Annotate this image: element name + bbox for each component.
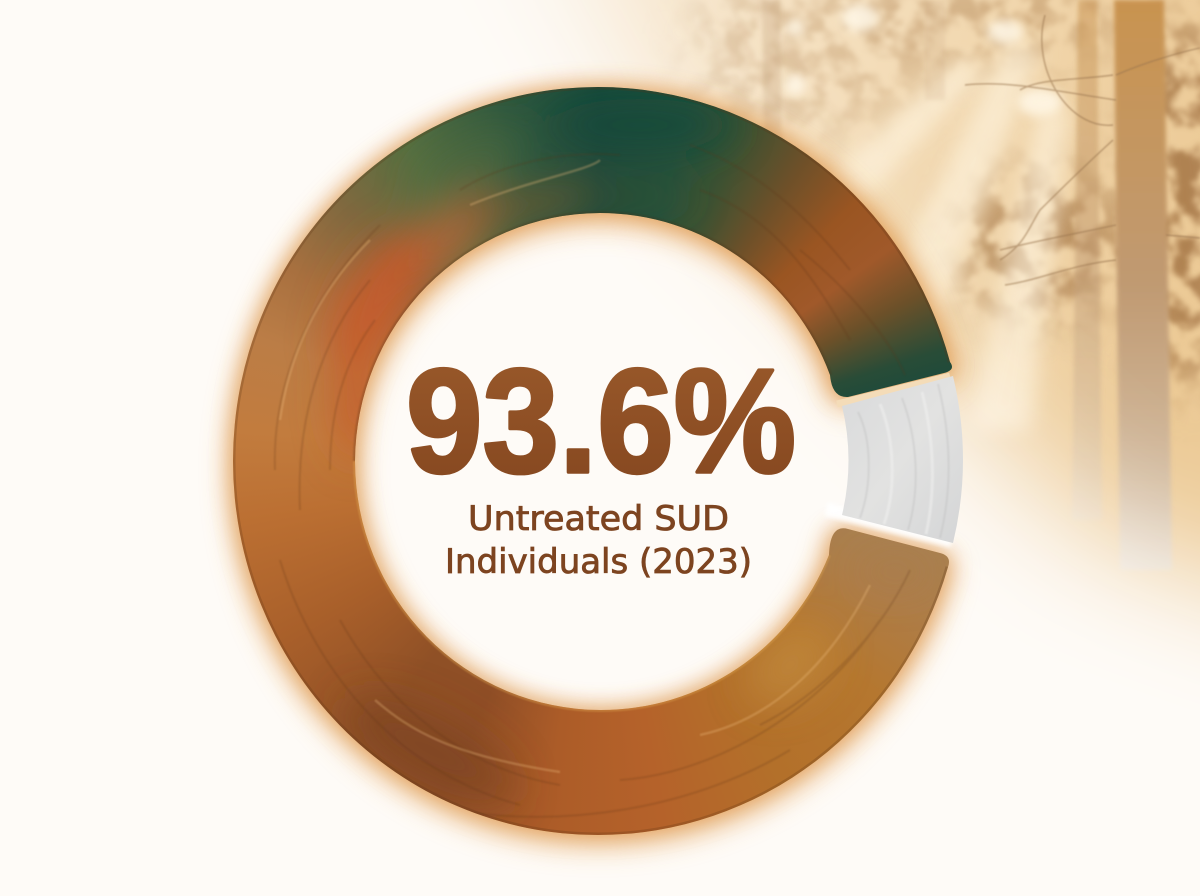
donut ring: 93.6% segment	[233, 87, 952, 835]
sun rays	[836, 40, 1075, 434]
bright sun spots	[785, 4, 1062, 116]
dappled pine foliage	[690, 0, 1200, 390]
pine branches	[965, 15, 1200, 285]
ring colour sweep	[233, 87, 952, 835]
label line 1: Untreated SUD	[468, 499, 729, 539]
ring shading and wood grain	[233, 87, 950, 835]
label line 2: Individuals (2023)	[445, 542, 752, 582]
background: misty forest with sun rays	[553, 0, 1200, 654]
big number: 93.6%	[406, 339, 796, 504]
tree trunks	[762, 0, 1172, 570]
